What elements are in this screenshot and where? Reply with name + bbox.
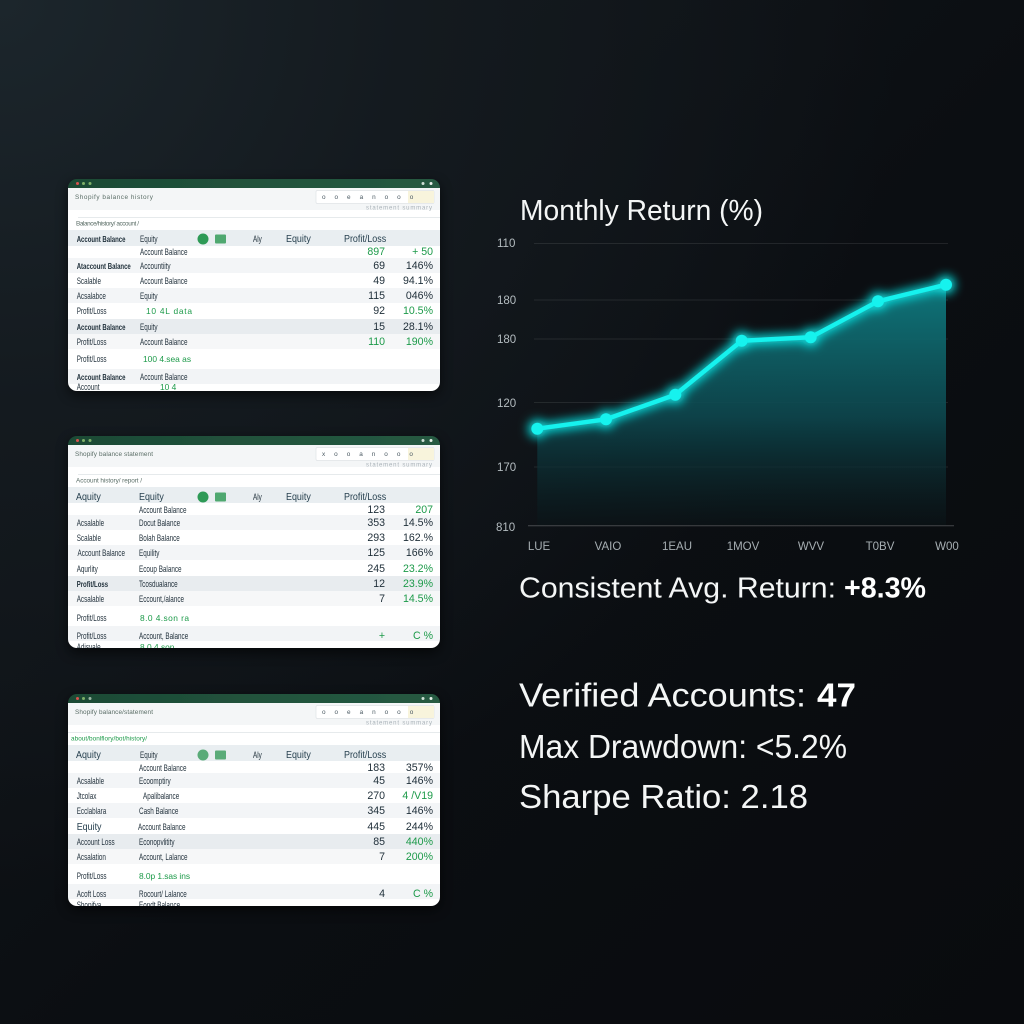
panel: account table card 1: Equity bbox=[286, 233, 311, 245]
panel: account table card 3: 345 bbox=[367, 805, 385, 817]
panel: account table card 2: Eccount,/alance bbox=[139, 594, 184, 604]
chart y axis labels: 110 bbox=[497, 238, 515, 250]
panel: account table card 3: statement summary bbox=[366, 720, 432, 726]
panel: account table card 3: Shopify balance/statement bbox=[75, 709, 153, 716]
panel: account table card 2: Aqurlity bbox=[77, 564, 98, 574]
panel: account table card 2: Docut Balance bbox=[139, 518, 180, 528]
panel: account table card 2: statement summary bbox=[366, 462, 432, 468]
panel: account table card 3: Rocourt/ Lalance bbox=[139, 889, 187, 899]
panel: account table card 3: 270 bbox=[367, 790, 385, 802]
chart: monthly return line chart bbox=[496, 238, 959, 553]
panel: account table card 3: 244% bbox=[406, 821, 434, 833]
panel: account table card 1: Account Balance bbox=[140, 337, 187, 347]
panel: account table card 1: Acsalabce bbox=[77, 291, 106, 301]
panel: account table card 1: Balance/history/ account / bbox=[76, 220, 139, 228]
panel: account table card 1 bbox=[68, 179, 440, 395]
panel: account table card 3: Profit/Loss bbox=[77, 871, 107, 881]
panel: account table card 2: 166% bbox=[406, 547, 434, 559]
panel: account table card 2: Equity bbox=[286, 491, 311, 503]
panel: account table card 2: Aly bbox=[253, 492, 262, 502]
panel: account table card 3: Equity bbox=[286, 749, 311, 761]
panel: account table card 1: 046% bbox=[406, 290, 434, 302]
panel: account table card 2: Profit/Loss bbox=[77, 613, 107, 623]
panel: account table card 3: about/bonlflory/bot/history/ bbox=[71, 736, 147, 742]
chart y axis labels: 180 bbox=[497, 295, 516, 307]
panel: account table card 1: Account Balance bbox=[77, 372, 125, 382]
chart area fill bbox=[537, 285, 946, 525]
panel: account table card 2: x o o a n o o o bbox=[322, 451, 417, 458]
panel: account table card 2: Scalable bbox=[77, 533, 101, 543]
panel: account table card 3: Aly bbox=[253, 750, 262, 760]
panel: account table card 1: Equity bbox=[140, 291, 158, 301]
panel: account table card 3: 445 bbox=[367, 821, 385, 833]
panel: account table card 3: 183 bbox=[367, 762, 385, 774]
panel: account table card 2: Profit/Loss bbox=[344, 491, 386, 503]
chart line glow bbox=[528, 276, 955, 438]
panel: account table card 1: 190% bbox=[406, 336, 434, 348]
panel: account table card 1: 115 bbox=[368, 290, 385, 302]
panel: account table card 3: 146% bbox=[406, 775, 434, 787]
panel: account table card 2: Profit/Loss bbox=[77, 631, 107, 641]
panel: account table card 1: + 50 bbox=[412, 246, 433, 258]
panel: account table card 2: 23.2% bbox=[403, 563, 434, 575]
panel: account table card 3: Ecoomptiry bbox=[139, 776, 171, 786]
heading: monthly return: Monthly Return (%) bbox=[520, 195, 763, 227]
panel: account table card 1: 10 4L data bbox=[146, 306, 192, 316]
panel: account table card 2: Shopify balance statement bbox=[75, 451, 153, 458]
panel: account table card 1: o o e a n o o o bbox=[322, 194, 417, 201]
panel: account table card 3: o o e a n o o o bbox=[322, 709, 417, 716]
chart grid lines bbox=[528, 244, 954, 526]
panel: account table card 3: Acsalation bbox=[77, 852, 106, 862]
panel: account table card 3: Account Loss bbox=[77, 837, 115, 847]
panel: account table card 3: 4 /V19 bbox=[402, 790, 433, 802]
panel: account table card 1: 897 bbox=[367, 246, 385, 258]
panel: account table card 2: 7 bbox=[379, 593, 385, 605]
panel: account table card 3: Cash Balance bbox=[139, 806, 178, 816]
panel: account table card 1: 110 bbox=[368, 336, 385, 348]
panel: account table card 2: Profit/Loss bbox=[77, 579, 108, 589]
panel: account table card 2: Account, Balance bbox=[139, 631, 188, 641]
panel: account table card 1: 10.5% bbox=[403, 305, 434, 317]
panel: account table card 2: C % bbox=[413, 630, 434, 642]
panel: account table card 3: Account, Lalance bbox=[139, 852, 188, 862]
chart data line and points bbox=[531, 279, 952, 435]
panel: account table card 2: 162.% bbox=[403, 532, 434, 544]
chart x axis labels: WVV bbox=[798, 541, 824, 553]
panel: account table card 3: Eondt Balance bbox=[139, 900, 180, 910]
panel: account table card 1: Aly bbox=[253, 234, 262, 244]
panel: account table card 1: 28.1% bbox=[403, 321, 434, 333]
text: verified accounts: 47 bbox=[817, 678, 856, 714]
panel: account table card 1: 146% bbox=[406, 260, 434, 272]
panel: account table card 3: 440% bbox=[406, 836, 434, 848]
panel: account table card 2: 14.5% bbox=[403, 517, 434, 529]
panel: account table card 2: Equity bbox=[139, 491, 164, 503]
panel: account table card 3: Ecclablara bbox=[77, 806, 107, 816]
panel: account table card 3: 4 bbox=[379, 888, 385, 900]
panel: account table card 1: 10 4 bbox=[160, 382, 177, 392]
chart x axis labels: 1MOV bbox=[727, 541, 760, 553]
text: consistent average return: Consistent Avg. Return: bbox=[519, 572, 836, 604]
panel: account table card 3: Aquity bbox=[76, 749, 101, 761]
panel: account table card 1: 15 bbox=[373, 321, 385, 333]
panel: account table card 1: Shopify balance history bbox=[75, 194, 154, 201]
panel: account table card 2: 293 bbox=[367, 532, 385, 544]
panel: account table card 2: Account Balance bbox=[139, 505, 186, 515]
panel: account table card 2: 8.0 4.son ra bbox=[140, 613, 189, 623]
panel: account table card 3: Acsalable bbox=[77, 776, 104, 786]
panel: account table card 2: Aquity bbox=[76, 491, 101, 503]
panel: account table card 1: Account Balance bbox=[77, 234, 125, 244]
chart x axis labels: VAIO bbox=[595, 541, 621, 553]
panel: account table card 1: 49 bbox=[373, 275, 385, 287]
panel: account table card 2: 8.0 4.son bbox=[140, 642, 175, 652]
panel: account table card 1: 100 4.sea as bbox=[143, 354, 191, 364]
panel: account table card 2: 123 bbox=[367, 504, 385, 516]
panel: account table card 3: Equity bbox=[77, 821, 102, 833]
text: verified accounts: Verified Accounts: bbox=[519, 676, 806, 714]
panel: account table card 1: Account Balance bbox=[140, 276, 187, 286]
panel: account table card 1: Profit/Loss bbox=[77, 306, 107, 316]
panel: account table card 2: 14.5% bbox=[403, 593, 434, 605]
panel: account table card 1: Equity bbox=[140, 234, 158, 244]
chart x axis labels: T0BV bbox=[866, 541, 895, 553]
panel: account table card 2 bbox=[68, 436, 440, 653]
panel: account table card 2: 23.9% bbox=[403, 578, 434, 590]
panel: account table card 3: Acoft Loss bbox=[77, 889, 106, 899]
panel: account table card 2: Adisvale bbox=[77, 642, 101, 652]
panel: account table card 1: Profit/Loss bbox=[77, 354, 107, 364]
panel: account table card 3: Shopifya bbox=[77, 900, 102, 910]
panel: account table card 1: Account Balance bbox=[77, 322, 125, 332]
panel: account table card 2: 125 bbox=[367, 547, 385, 559]
text: sharpe ratio: Sharpe Ratio: 2.18 bbox=[519, 778, 808, 815]
panel: account table card 1: Scalable bbox=[77, 276, 101, 286]
chart y axis labels: 170 bbox=[497, 462, 516, 474]
panel: account table card 2: Acsalable bbox=[77, 594, 104, 604]
panel: account table card 1: Account bbox=[77, 382, 100, 392]
panel: account table card 2: Acsalable bbox=[77, 518, 104, 528]
panel: account table card 1: 69 bbox=[373, 260, 385, 272]
panel: account table card 3: 8.0p 1.sas ins bbox=[139, 871, 190, 881]
panel: account table card 3: Econopvlitity bbox=[139, 837, 175, 847]
panel: account table card 2: Account Balance bbox=[78, 548, 125, 558]
panel: account table card 1: 94.1% bbox=[403, 275, 434, 287]
panel: account table card 3: Account Balance bbox=[138, 822, 185, 832]
chart y axis labels: 120 bbox=[497, 398, 516, 410]
chart x axis labels: W00 bbox=[935, 541, 959, 553]
panel: account table card 3: 200% bbox=[406, 851, 434, 863]
chart x axis labels: 1EAU bbox=[662, 541, 692, 553]
panel: account table card 3: Equity bbox=[140, 750, 158, 760]
panel: account table card 3: 357% bbox=[406, 762, 434, 774]
panel: account table card 3: 7 bbox=[379, 851, 385, 863]
panel: account table card 2: Account history/ report / bbox=[76, 478, 142, 484]
panel: account table card 1: Account Balance bbox=[140, 247, 187, 257]
panel: account table card 2: 353 bbox=[367, 517, 385, 529]
text: consistent average return: +8.3% bbox=[844, 572, 926, 604]
panel: account table card 3: C % bbox=[413, 888, 434, 900]
chart y axis labels: 810 bbox=[496, 522, 515, 534]
panel: account table card 3: 85 bbox=[373, 836, 385, 848]
chart y axis labels: 180 bbox=[497, 334, 516, 346]
panel: account table card 3: Apalibalance bbox=[143, 791, 179, 801]
panel: account table card 3: Account Balance bbox=[139, 763, 186, 773]
panel: account table card 2: 207 bbox=[415, 504, 433, 516]
chart x axis labels bbox=[528, 541, 959, 553]
chart y axis labels bbox=[496, 238, 516, 534]
panel: account table card 2: Ecoup Balance bbox=[139, 564, 182, 574]
panel: account table card 1: Account Balance bbox=[140, 372, 187, 382]
panel: account table card 1: Profit/Loss bbox=[344, 233, 386, 245]
panel: account table card 1: Accountiity bbox=[140, 261, 171, 271]
panel: account table card 3: Profit/Loss bbox=[344, 749, 386, 761]
panel: account table card 2: 12 bbox=[373, 578, 385, 590]
panel: account table card 2: + bbox=[379, 630, 385, 642]
panel: account table card 2: Equility bbox=[139, 548, 160, 558]
panel: account table card 3: Jtcolax bbox=[77, 791, 97, 801]
panel: account table card 3 bbox=[68, 694, 440, 910]
panel: account table card 2: 245 bbox=[367, 563, 385, 575]
panel: account table card 2: Bolah Balance bbox=[139, 533, 180, 543]
panel: account table card 1: Profit/Loss bbox=[77, 337, 107, 347]
text: max drawdown: Max Drawdown: <5.2% bbox=[519, 728, 847, 765]
panel: account table card 1: statement summary bbox=[366, 206, 432, 212]
panel: account table card 3: 146% bbox=[406, 805, 434, 817]
panel: account table card 3: 45 bbox=[373, 775, 385, 787]
panel: account table card 2: Tcosdualance bbox=[139, 579, 178, 589]
panel: account table card 1: 92 bbox=[373, 305, 385, 317]
panel: account table card 1: Ataccount Balance bbox=[77, 261, 131, 271]
chart x axis labels: LUE bbox=[528, 541, 551, 553]
panel: account table card 1: Equity bbox=[140, 322, 158, 332]
